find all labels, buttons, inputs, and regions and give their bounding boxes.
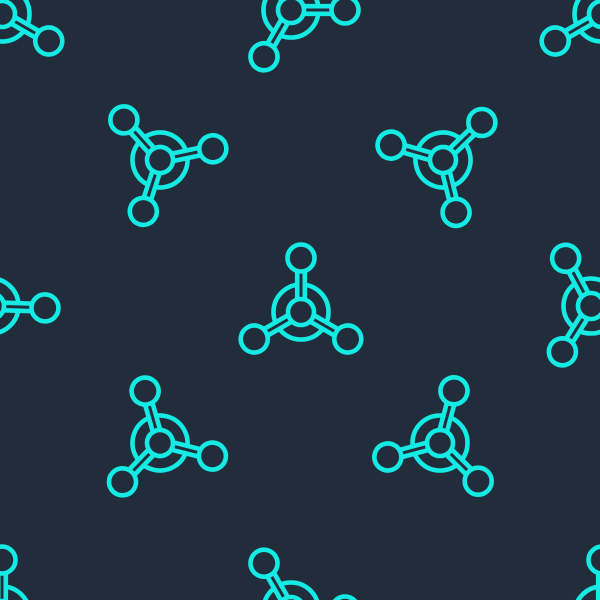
icon: molecule bottom-right [362, 365, 534, 537]
icon: molecule top-right [369, 100, 523, 241]
icon: molecule top edge [246, 0, 358, 75]
icon: molecule left edge [0, 239, 61, 374]
icon: molecule top-left [102, 82, 240, 233]
icon: molecule right edge [543, 239, 600, 374]
icon: molecule center [236, 244, 366, 357]
icon: molecule bottom-left [100, 369, 241, 523]
icon: molecule bottom edge [246, 545, 358, 600]
